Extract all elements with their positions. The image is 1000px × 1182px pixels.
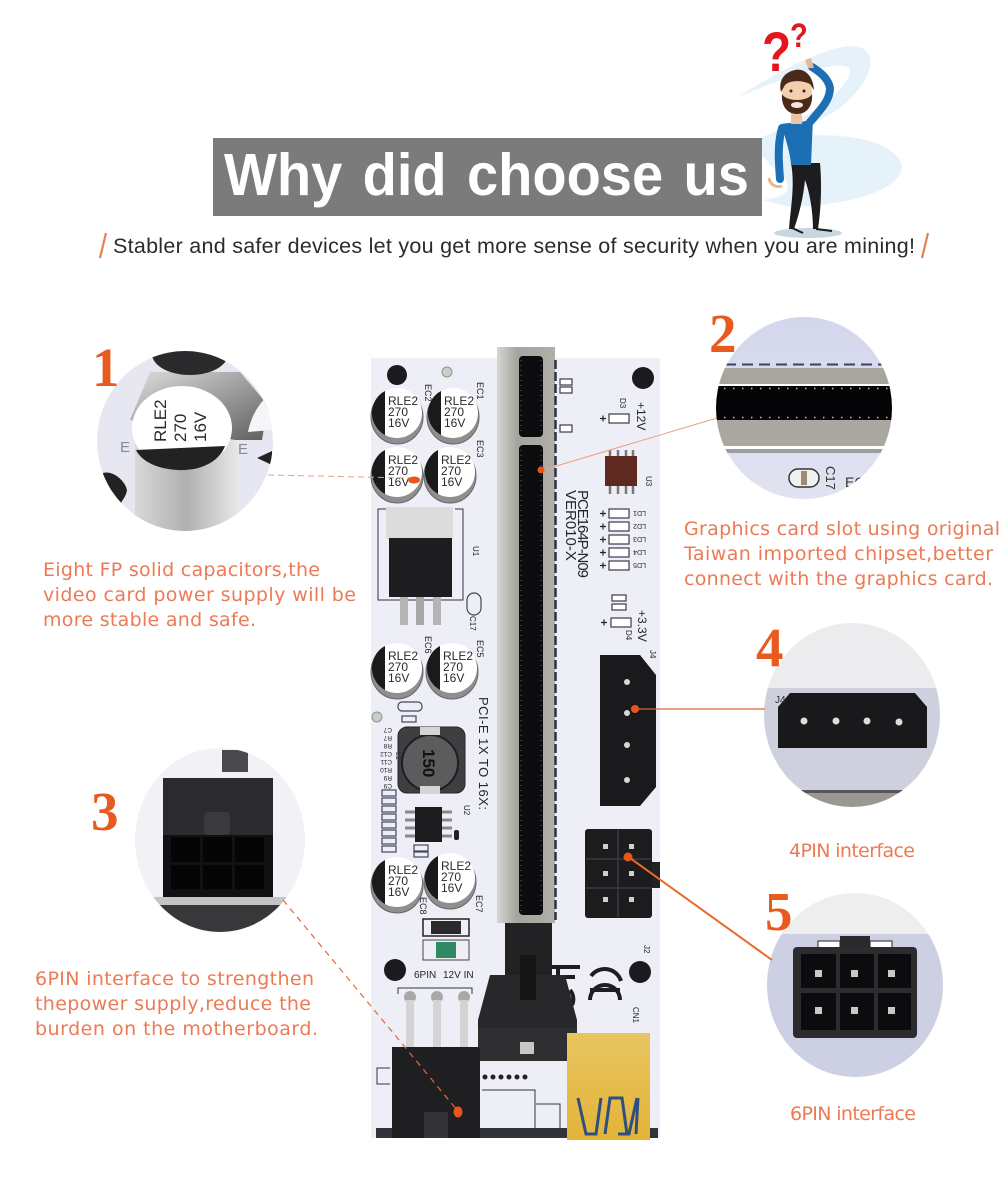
- detail photo 3: [130, 745, 310, 935]
- number 5: 5: [765, 881, 792, 942]
- capacitors: 270: [388, 464, 408, 478]
- head: [791, 110, 802, 124]
- riser cable connector: [478, 923, 577, 1061]
- detail photo 1: [97, 351, 273, 531]
- capacitors: 16V: [388, 416, 409, 430]
- raised arm: [810, 67, 830, 122]
- detail photo 2: [715, 315, 895, 505]
- number 2: 2: [709, 303, 736, 364]
- description 2: Graphics card slot using original: [684, 518, 1000, 540]
- FCC CE marks: [552, 967, 621, 1005]
- subtitle: Stabler and safer devices let you get more sense of security when you are mining!: [113, 234, 915, 258]
- number 4: 4: [756, 617, 784, 678]
- detail photo 1: E: [120, 439, 130, 456]
- silkscreen labels: C17: [468, 616, 477, 631]
- capacitors: RLE2: [388, 453, 418, 467]
- detail photo 4: [760, 620, 945, 809]
- capacitors: 16V: [441, 475, 462, 489]
- lower arm: [779, 128, 782, 179]
- regulator U1: [378, 507, 463, 625]
- capacitors: 16V: [441, 881, 462, 895]
- question marks: ?: [790, 16, 808, 55]
- callout 5: 6PIN interface: [624, 852, 950, 1125]
- silkscreen labels: R7: [383, 734, 392, 741]
- silkscreen labels: EC6: [423, 636, 433, 654]
- 6-pin power header: [392, 988, 480, 1138]
- capacitors: 270: [443, 660, 463, 674]
- silkscreen labels: L1: [394, 752, 401, 760]
- silkscreen labels: PCE164P-N09: [574, 490, 591, 578]
- silkscreen labels: 6PIN: [414, 970, 436, 981]
- inductor L1: [398, 727, 465, 794]
- question marks: ?: [762, 21, 791, 84]
- legs: [789, 163, 821, 229]
- capacitors: RLE2: [388, 863, 418, 877]
- detail photo 1: E: [238, 441, 248, 458]
- inductor L1: 150: [419, 749, 438, 777]
- silkscreen labels: EC1: [475, 382, 485, 400]
- capacitors: 270: [388, 874, 408, 888]
- silkscreen labels: EC7: [474, 895, 484, 913]
- silkscreen labels: R9: [383, 774, 392, 781]
- detail photo 2: C17: [823, 466, 838, 490]
- silkscreen labels: +12V: [634, 402, 648, 430]
- caption 5: 6PIN interface: [790, 1103, 916, 1125]
- silkscreen labels: PCI-E 1X TO 16X:: [476, 697, 491, 810]
- silkscreen labels: LD1: [633, 509, 646, 516]
- capacitors: 16V: [388, 475, 409, 489]
- capacitors: RLE2: [441, 453, 471, 467]
- capacitors: RLE2: [444, 394, 474, 408]
- description 3: 6PIN interface to strengthen: [35, 968, 314, 990]
- silkscreen labels: D4: [624, 630, 633, 641]
- swoosh background: [738, 46, 902, 207]
- description 2: connect with the graphics card.: [684, 568, 993, 590]
- caption 4: 4PIN interface: [789, 840, 915, 862]
- indicator leds: [560, 379, 631, 627]
- silkscreen labels: C12: [380, 750, 392, 757]
- leader line 1: [268, 475, 420, 484]
- description 1: [43, 559, 356, 631]
- silkscreen labels: LD3: [633, 535, 646, 542]
- callout 4: 4PIN interface: [631, 617, 945, 862]
- silkscreen labels: LD2: [633, 522, 646, 529]
- capacitors: 270: [388, 405, 408, 419]
- silkscreen labels: VER010-X: [562, 490, 579, 561]
- description 1: Eight FP solid capacitors,the: [43, 559, 320, 581]
- description 3: thepower supply,reduce the: [35, 993, 311, 1015]
- capacitors: 270: [441, 870, 461, 884]
- detail photo 2: EC3: [845, 474, 872, 490]
- number 3: 3: [91, 781, 118, 842]
- silkscreen labels: U3: [644, 476, 653, 487]
- capacitors: RLE2: [443, 649, 473, 663]
- silkscreen labels: EC3: [475, 440, 485, 458]
- silkscreen labels: EC5: [475, 640, 485, 658]
- description 3: burden on the motherboard.: [35, 1018, 318, 1040]
- silkscreen labels: R8: [383, 742, 392, 749]
- 6-pin connector J2: [585, 829, 660, 918]
- illustration: confused man with question marks: [738, 16, 902, 238]
- detail photo 1: 16V: [191, 411, 210, 442]
- fuse and diode: [423, 919, 469, 960]
- silkscreen labels: C7: [383, 726, 392, 733]
- silkscreen labels: EC8: [418, 897, 428, 915]
- PCIe x16 slot: [497, 347, 556, 923]
- callout 3: 6PIN power: [35, 745, 462, 1118]
- silkscreen labels: J2: [642, 945, 651, 954]
- leader line 3: [283, 900, 462, 1118]
- hair: [780, 70, 814, 92]
- description 1: video card power supply will be: [43, 584, 356, 606]
- detail photo 5: [765, 890, 950, 1080]
- question marks: [762, 16, 808, 84]
- silkscreen labels: LD4: [633, 548, 646, 555]
- pcb: [371, 358, 660, 1138]
- description 3: [35, 968, 318, 1040]
- silkscreen labels: U1: [471, 546, 480, 557]
- silkscreen labels: LD5: [633, 561, 646, 568]
- callout 2: graphics card slot: [538, 303, 1000, 590]
- detail photo 4: J4: [775, 695, 786, 706]
- leader line 4: [631, 705, 765, 713]
- chip U2: [405, 807, 459, 842]
- led plus marks: [600, 416, 607, 626]
- capacitors: 16V: [388, 885, 409, 899]
- silkscreen labels: J4: [648, 650, 657, 659]
- riser board: [371, 347, 660, 1140]
- silkscreen labels: +3.3V: [635, 610, 649, 642]
- capacitors: 16V: [388, 671, 409, 685]
- silkscreen labels: C11: [380, 758, 392, 765]
- beard: [782, 94, 812, 114]
- capacitors: 270: [444, 405, 464, 419]
- shadow: [774, 228, 842, 238]
- silkscreen labels: [380, 382, 657, 1024]
- leader line 2: [538, 418, 717, 474]
- small parts column: [382, 593, 481, 857]
- capacitors: 16V: [443, 671, 464, 685]
- silkscreen labels: CN1: [631, 1007, 640, 1024]
- silkscreen labels: 12V IN: [443, 970, 474, 981]
- leader line 5: [624, 852, 772, 960]
- capacitors: RLE2: [441, 859, 471, 873]
- silkscreen labels: C9: [383, 782, 392, 789]
- mounting holes: [384, 365, 654, 983]
- silkscreen labels: U2: [462, 805, 471, 816]
- detail photo 1: 270: [171, 414, 190, 442]
- title banner: Why did choose us: [224, 143, 749, 208]
- description 2: Taiwan imported chipset,better: [683, 543, 993, 565]
- silkscreen labels: EC2: [423, 384, 433, 402]
- chip U3: [605, 450, 637, 494]
- callout 1: capacitors: [43, 333, 420, 631]
- description 2: [683, 518, 1000, 590]
- USB 3.0 port: [567, 1033, 650, 1140]
- detail photo 1: RLE2: [151, 399, 170, 442]
- capacitors: 16V: [444, 416, 465, 430]
- number 1: 1: [92, 337, 120, 398]
- description 1: more stable and safe.: [43, 609, 256, 631]
- 4-pin connector J4: [600, 655, 656, 806]
- pcb traces: [377, 1068, 560, 1128]
- capacitors: [371, 388, 479, 913]
- capacitors: 270: [441, 464, 461, 478]
- torso: [782, 118, 813, 165]
- capacitors: RLE2: [388, 649, 418, 663]
- silkscreen labels: R10: [380, 766, 392, 773]
- silkscreen labels: D3: [618, 398, 627, 409]
- capacitors: 270: [388, 660, 408, 674]
- capacitors: RLE2: [388, 394, 418, 408]
